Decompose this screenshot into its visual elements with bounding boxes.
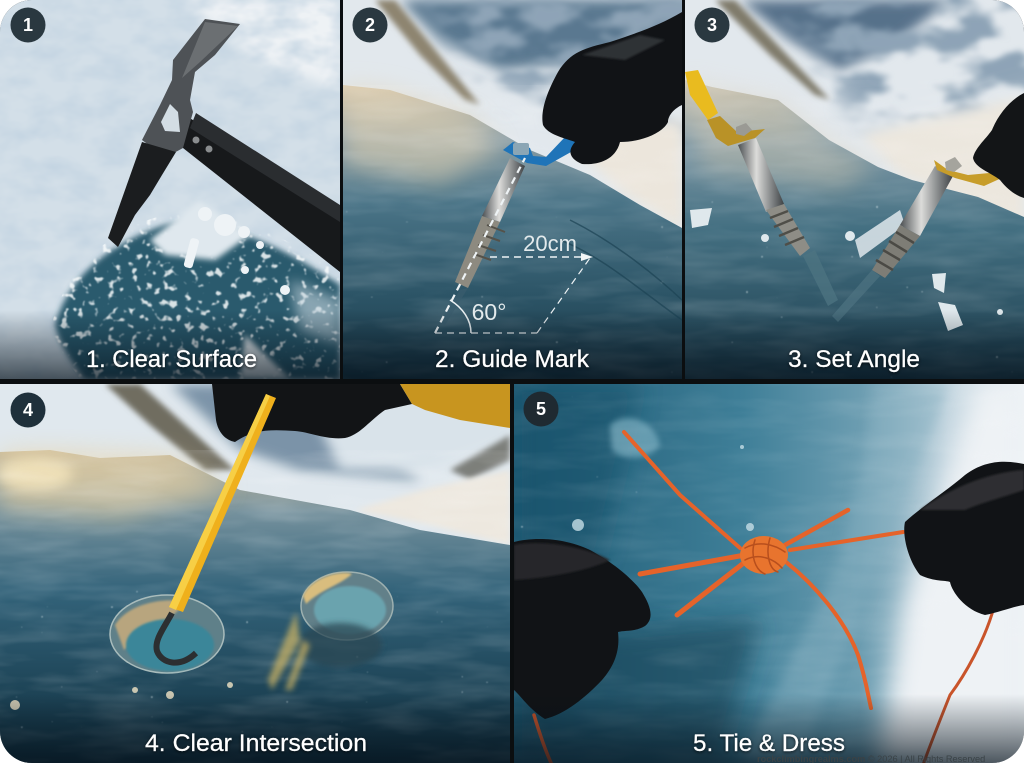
step 2 label: 2. Guide Mark — [435, 346, 590, 373]
ice surface — [343, 85, 682, 379]
badge 4: 4 — [23, 400, 33, 420]
guide dashes — [435, 158, 590, 333]
step 1 label: 1. Clear Surface — [86, 346, 257, 373]
badge 4 — [10, 392, 46, 428]
step 3 label: 3. Set Angle — [788, 346, 920, 373]
ice hole 2 — [268, 572, 393, 690]
badge 3: 3 — [707, 15, 717, 35]
panel 1: clear surface — [0, 0, 340, 379]
badge 3 — [694, 8, 730, 42]
badge 1: 1 — [23, 15, 33, 35]
step 5 label: 5. Tie & Dress — [693, 730, 845, 757]
left ice screw — [738, 138, 838, 306]
orange rope and knot — [534, 432, 994, 765]
ice surface — [685, 80, 1024, 379]
panel 2: guide mark — [343, 0, 682, 379]
icon: left glove — [514, 539, 651, 719]
badge 5 — [524, 392, 558, 426]
panel 4: clear intersection — [0, 384, 510, 763]
badge 2 — [352, 8, 388, 42]
angle label 60 degrees: 60° — [472, 299, 506, 325]
badge 2: 2 — [365, 15, 375, 35]
icon: ice axe — [108, 19, 340, 272]
panel 5: tie and dress — [514, 384, 1024, 765]
ice screw — [455, 158, 525, 298]
icon: right glove — [904, 462, 1024, 615]
right ice screw — [832, 166, 953, 322]
ice surface — [0, 450, 510, 763]
mountains — [400, 0, 682, 70]
badge 5: 5 — [536, 399, 546, 419]
yellow hanger right — [934, 157, 1006, 186]
mountains — [740, 0, 950, 70]
exposed ice patch — [55, 223, 340, 379]
blue hanger — [503, 137, 577, 166]
ice hole 1 — [110, 595, 224, 673]
watermark: rockclimbingrealms.com © 2026 | All Rights Reserved — [757, 754, 985, 764]
icon: glove right — [973, 93, 1024, 198]
badge 1 — [10, 8, 46, 42]
jacket sleeve — [400, 384, 510, 428]
step 4 label: 4. Clear Intersection — [145, 730, 367, 757]
yellow hanger left — [685, 70, 765, 146]
panel 3: set angle — [685, 0, 1024, 379]
yellow probe with hook — [156, 394, 276, 663]
icon: glove — [212, 384, 412, 442]
icon: glove — [542, 12, 682, 164]
measurement label 20cm: 20cm — [523, 231, 577, 256]
